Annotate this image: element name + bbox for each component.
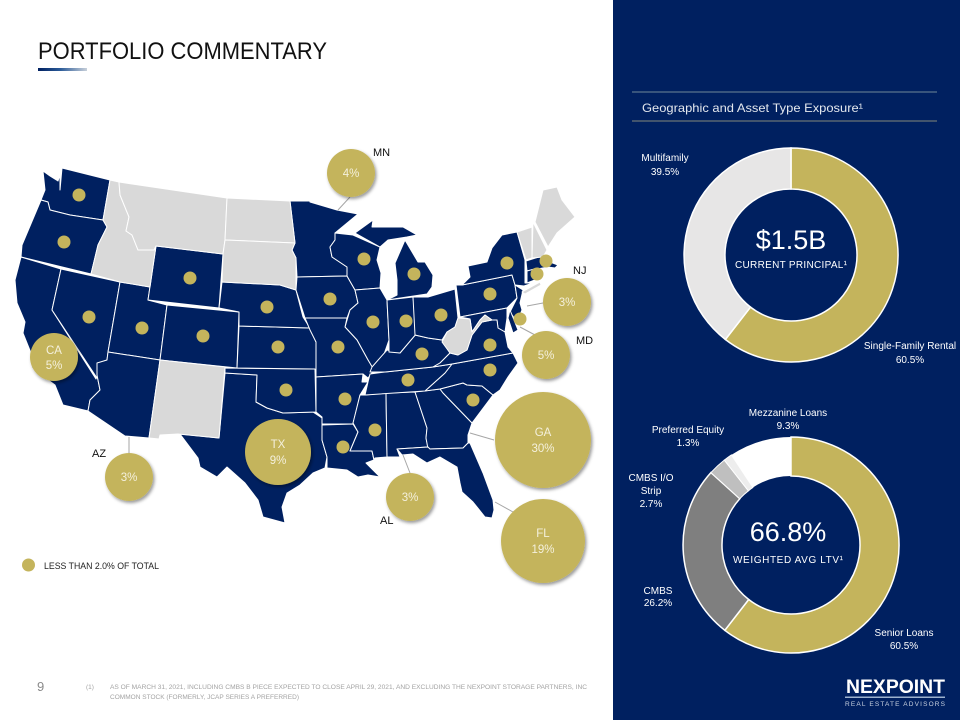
chart: property type donut: 39.5% <box>651 167 679 178</box>
callout: MN <box>327 147 390 197</box>
callout: MN: MN <box>373 147 390 159</box>
chart: investment type donut: Preferred Equity <box>652 425 724 436</box>
chart: investment type donut: Mezzanine Loans <box>749 408 827 419</box>
callout leader lines <box>129 197 543 512</box>
callout: GA: GA <box>535 427 552 439</box>
callout: FL: FL <box>536 528 550 540</box>
callout: NJ <box>543 265 591 326</box>
logo: NexPoint <box>845 677 946 708</box>
callout: AL: AL <box>380 515 393 527</box>
logo: NexPoint: REAL ESTATE ADVISORS <box>845 701 946 708</box>
chart: property type donut: 60.5% <box>896 355 924 366</box>
map: United States by state <box>15 168 575 523</box>
chart: investment type donut: 2.7% <box>640 499 663 510</box>
legend: LESS THAN 2.0% OF TOTAL <box>44 561 159 572</box>
callout: CA <box>30 333 78 381</box>
icons: state dots under 2 percent <box>58 188 552 454</box>
callout: GA <box>495 392 591 488</box>
callout: TX <box>245 419 311 485</box>
footnote: COMMON STOCK (FORMERLY, JCAP SERIES A PREFERRED) <box>110 694 299 701</box>
title underline <box>38 68 87 71</box>
footnote: (1) <box>86 684 94 691</box>
callout: GA: 30% <box>531 443 555 455</box>
callout: CA: 5% <box>46 360 62 372</box>
panel: navy sidebar <box>613 0 960 720</box>
chart: investment type donut: 66.8% <box>750 517 826 547</box>
logo: NexPoint: NEXPOINT <box>846 677 945 698</box>
heading: exposure: Geographic and Asset Type Exposure¹ <box>642 101 863 115</box>
callout: MN: 4% <box>343 168 359 180</box>
callout: TX: TX <box>271 439 286 451</box>
callout: AZ <box>92 448 153 501</box>
chart: investment type donut: 9.3% <box>777 421 800 432</box>
legend <box>22 558 159 572</box>
callout: NJ: NJ <box>573 265 586 277</box>
chart: property type donut <box>641 148 956 366</box>
page number: 9 <box>37 679 44 694</box>
callout: NJ: 3% <box>559 297 575 309</box>
chart: investment type donut: 60.5% <box>890 641 918 652</box>
title: PORTFOLIO COMMENTARY <box>38 38 327 65</box>
chart: property type donut: Multifamily <box>641 153 689 164</box>
callout: AZ: AZ <box>92 448 106 460</box>
chart: investment type donut: 1.3% <box>677 438 700 449</box>
chart: investment type donut: Senior Loans <box>875 628 933 639</box>
callout: AL: 3% <box>402 492 418 504</box>
callout: FL <box>501 499 585 583</box>
callout: FL: 19% <box>531 544 555 556</box>
callout: MD: MD <box>576 335 593 347</box>
callout: AZ: 3% <box>121 472 137 484</box>
chart: investment type donut: WEIGHTED AVG LTV¹ <box>733 555 844 566</box>
footnote <box>86 684 587 701</box>
footnote: AS OF MARCH 31, 2021, INCLUDING CMBS B PIECE EXPECTED TO CLOSE APRIL 29, 2021, AND EXCLUDING THE NEXPOINT STORAGE PARTNERS, INC <box>110 684 587 691</box>
chart: investment type donut <box>628 408 933 653</box>
callout: TX: 9% <box>270 455 286 467</box>
chart: property type donut: $1.5B <box>756 225 826 255</box>
chart: investment type donut: 26.2% <box>644 598 672 609</box>
chart: investment type donut: Strip <box>641 486 662 497</box>
chart: investment type donut: CMBS <box>644 586 673 597</box>
callout: MD <box>522 331 593 379</box>
chart: property type donut: Single-Family Rental <box>864 341 956 352</box>
callout: AL <box>380 473 434 527</box>
chart: property type donut: CURRENT PRINCIPAL¹ <box>735 260 848 271</box>
callout: CA: CA <box>46 345 62 357</box>
callout: MD: 5% <box>538 350 554 362</box>
chart: investment type donut: CMBS I/O <box>628 473 674 484</box>
